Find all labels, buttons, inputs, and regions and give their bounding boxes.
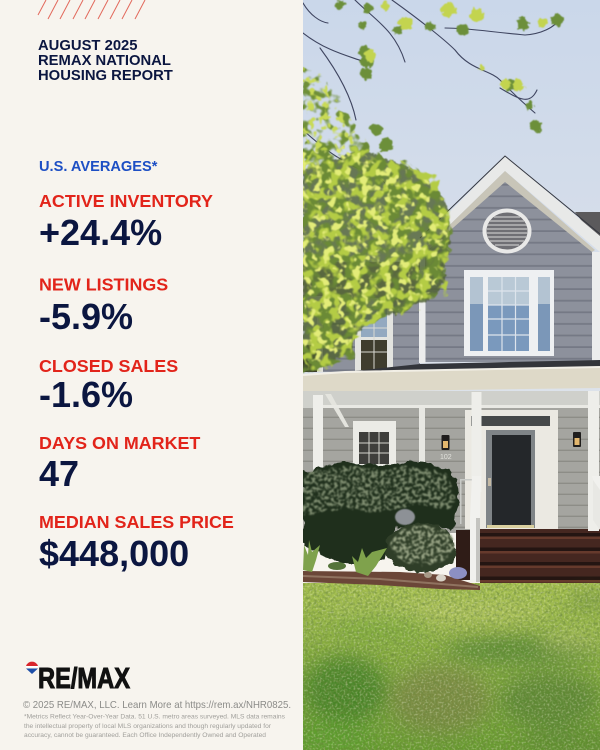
disclaimer: *Metrics Reflect Year-Over-Year Data. 51 U.S. metro areas surveyed. MLS data remains	[24, 714, 286, 720]
stat: closed sales: -1.6%	[39, 374, 133, 415]
porch beam	[325, 394, 349, 427]
porch wall siding	[303, 408, 600, 533]
tree canopy: sparse upper foliage	[303, 66, 369, 175]
disclaimer	[24, 714, 286, 739]
disclaimer: accuracy, cannot be guaranteed. Each Office Independently Owned and Operated	[24, 732, 266, 739]
decorative red hatch lines	[38, 0, 145, 19]
stat: active inventory: ACTIVE INVENTORY	[39, 191, 213, 211]
lawn	[285, 583, 600, 750]
stat: days on market: DAYS ON MARKET	[39, 433, 200, 453]
stat: closed sales	[39, 356, 178, 415]
brick steps	[480, 529, 600, 587]
stat: median sales price: MEDIAN SALES PRICE	[39, 512, 234, 532]
stat: median sales price: $448,000	[39, 533, 189, 574]
stat: new listings	[39, 274, 168, 337]
photo: house and garden	[285, 0, 600, 750]
house: round vent	[482, 208, 532, 254]
copyright line: © 2025 RE/MAX, LLC. Learn More at https://rem.ax/NHR0825.	[23, 699, 291, 711]
stat: active inventory	[39, 191, 213, 253]
house: main window	[464, 270, 554, 356]
wall lamps	[442, 432, 581, 450]
stat: median sales price	[39, 512, 234, 574]
house: far left window	[303, 296, 323, 372]
title: HOUSING REPORT	[38, 68, 173, 84]
daffodil plants	[303, 540, 387, 576]
porch roof	[355, 360, 600, 371]
stat: new listings: -5.9%	[39, 296, 133, 337]
background panel	[0, 0, 303, 750]
tree canopy: dark foliage layer	[303, 145, 452, 374]
tree leaves: sparse top clusters	[335, 0, 564, 152]
porch fascia	[303, 367, 600, 392]
stat: new listings: NEW LISTINGS	[39, 274, 168, 294]
tree canopy: shadow underlay	[303, 150, 450, 372]
big shrub	[303, 463, 459, 564]
title	[38, 38, 173, 84]
house number: 102	[440, 454, 452, 461]
tree branches	[303, 0, 560, 200]
porch ceiling	[303, 391, 600, 409]
door surround	[465, 410, 558, 529]
stat: days on market	[39, 433, 200, 494]
door	[492, 435, 531, 525]
title: REMAX NATIONAL	[38, 53, 171, 69]
house: left wing wall	[303, 262, 420, 372]
stat: closed sales: CLOSED SALES	[39, 356, 178, 376]
porch railing	[460, 476, 600, 582]
porch window	[353, 421, 396, 467]
title: AUGUST 2025	[38, 38, 138, 54]
stat: active inventory: +24.4%	[39, 212, 162, 253]
RE/MAX logo	[26, 662, 131, 695]
sky	[303, 0, 600, 400]
flowers and rocks	[328, 562, 467, 582]
house: gable trim	[419, 156, 600, 363]
disclaimer: the intellectual property of local MLS organizations and though regularly updated for	[24, 723, 272, 730]
house: gable siding	[425, 181, 592, 362]
porch columns	[313, 391, 599, 531]
tree canopy: mid green layer	[303, 145, 452, 374]
small shrub	[386, 523, 456, 573]
house: upper left window	[355, 298, 393, 372]
stat: days on market: 47	[39, 453, 79, 494]
brick foundation	[456, 530, 470, 580]
mulch bed	[303, 571, 480, 590]
icon: balloon	[26, 662, 38, 674]
wordmark: RE/MAX	[38, 663, 131, 695]
tree canopy: bright yellow layer	[303, 150, 448, 370]
subheading: U.S. averages: U.S. AVERAGES*	[39, 159, 158, 175]
distant roof right	[575, 212, 600, 236]
